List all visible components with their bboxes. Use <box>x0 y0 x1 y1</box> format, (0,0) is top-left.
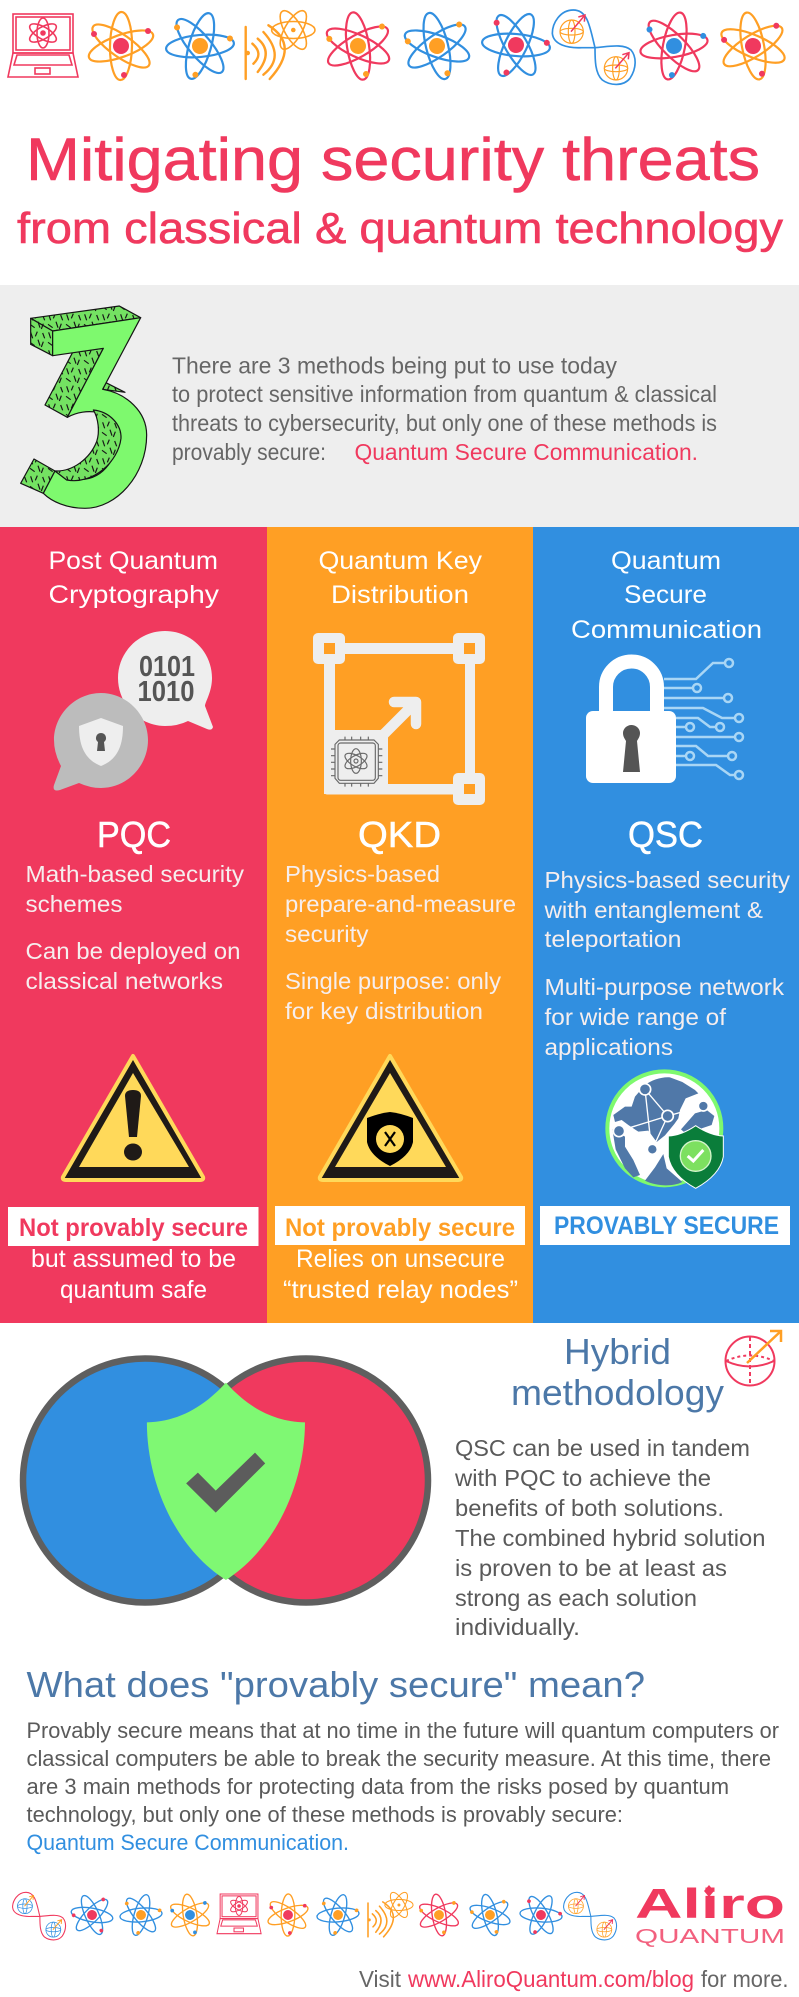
icon: red atom <box>414 1890 464 1940</box>
icon: orange atom <box>165 1890 215 1940</box>
text: hybrid explanation: The combined hybrid solution <box>455 1525 766 1551</box>
panel: QKD <box>267 527 533 1323</box>
icon: globe with green shield <box>607 1071 723 1188</box>
callout: not provably secure: Not provably secure <box>19 1214 248 1242</box>
heading: Hybrid methodology <box>511 1331 724 1413</box>
text: hybrid explanation: strong as each solution <box>455 1585 697 1611</box>
description: QSC: Multi-purpose network <box>544 974 785 1000</box>
heading: Quantum Key Distribution <box>318 547 483 609</box>
icon: blue atom <box>394 4 480 88</box>
icon: key distribution diagram <box>313 633 485 805</box>
text: hybrid explanation <box>454 1435 766 1640</box>
description: QSC <box>543 867 791 1060</box>
icon: signal waves and atom <box>245 7 315 79</box>
description: QSC: applications <box>544 1034 673 1060</box>
text: definition: classical computers be able to break the security measure. At this time, there <box>26 1746 771 1771</box>
heading: Quantum Key Distribution: Distribution <box>331 581 469 609</box>
icon: padlock with circuit lines <box>586 659 743 783</box>
icon: orange atom <box>711 5 795 87</box>
icon: orange atom <box>85 12 157 80</box>
logo: Aliro Quantum <box>635 1880 785 1948</box>
description: PQC: Math-based security <box>26 861 245 887</box>
icon: speech bubbles: 0101 <box>139 651 195 683</box>
footer link text: for more. <box>701 1966 788 1992</box>
bottom row of quantum icons <box>13 1886 617 1944</box>
top row of quantum icons <box>8 0 795 91</box>
text: hybrid explanation: individually. <box>455 1614 580 1640</box>
icon: red atom <box>317 6 399 86</box>
callout: not provably secure <box>275 1206 525 1245</box>
heading: Quantum Secure Communication: Secure <box>624 581 707 609</box>
title: from classical & quantum technology <box>17 204 783 253</box>
note: trusted relay nodes <box>283 1245 518 1304</box>
intro text: to protect sensitive information from quantum & classical <box>172 381 717 407</box>
description: PQC <box>26 861 245 994</box>
label: QKD: QKD <box>358 814 441 855</box>
icon: blue atom <box>463 1889 517 1941</box>
description: QSC: for wide range of <box>544 1004 727 1030</box>
note: assumed quantum safe: quantum safe <box>60 1276 207 1304</box>
text: hybrid explanation: is proven to be at least as <box>455 1555 727 1581</box>
text: hybrid explanation: QSC can be used in tandem <box>455 1435 750 1461</box>
icon: blue atom <box>114 1889 168 1941</box>
footer link text <box>359 1966 788 1992</box>
description: QKD: Physics-based <box>285 861 440 887</box>
label: QSC: QSC <box>628 814 703 855</box>
intro text: threats to cybersecurity, but only one of these methods is <box>172 410 717 436</box>
icon: laptop <box>8 14 78 77</box>
description: QSC: with entanglement & <box>543 897 763 923</box>
heading: what does provably secure mean: What does "provably secure" mean? <box>26 1664 645 1705</box>
panel: PQC <box>0 527 267 1323</box>
note: assumed quantum safe <box>31 1245 236 1304</box>
icon: blue atom <box>157 4 243 88</box>
description: QSC: teleportation <box>544 926 682 952</box>
icon: blue atom <box>512 1886 570 1944</box>
text: definition <box>26 1718 779 1855</box>
text: definition: are 3 main methods for protecting data from the risks posed by quantum <box>26 1774 729 1799</box>
icon: red atom with blue nucleus <box>633 6 715 86</box>
icon: signal waves and atom <box>368 1890 413 1937</box>
heading: Quantum Secure Communication <box>571 547 762 644</box>
icon: speech bubbles: 1010 <box>138 676 194 708</box>
description: PQC: classical networks <box>26 968 223 994</box>
heading: Post Quantum Cryptography <box>48 547 220 609</box>
note: trusted relay nodes: Relies on unsecure <box>296 1245 505 1273</box>
title <box>17 126 783 253</box>
icon: blue atom <box>63 1886 121 1944</box>
icon: speech bubbles <box>54 631 213 790</box>
callout: provably secure <box>540 1206 790 1245</box>
footer link text: Visit <box>359 1966 402 1992</box>
description: PQC: schemes <box>26 891 123 917</box>
icon: big green 3 <box>21 306 147 508</box>
intro text: There are 3 methods being put to use today <box>172 352 617 378</box>
title: Mitigating security threats <box>26 126 760 193</box>
text: definition: technology, but only one of these methods is provably secure: <box>26 1802 623 1827</box>
logo: Aliro Quantum: Aliro <box>635 1880 785 1927</box>
panel: QSC <box>533 527 799 1323</box>
icon: orange atom <box>266 1894 310 1936</box>
heading: Quantum Key Distribution: Quantum Key <box>318 547 483 575</box>
venn diagram with shield <box>23 1358 428 1602</box>
intro text <box>172 352 717 465</box>
text: hybrid explanation: with PQC to achieve the <box>454 1465 711 1491</box>
panel: intro <box>0 285 799 527</box>
description: QKD: security <box>285 921 369 947</box>
callout: not provably secure <box>8 1207 258 1246</box>
intro text: Quantum Secure Communication. <box>354 439 698 465</box>
text: hybrid explanation: benefits of both solutions. <box>455 1495 724 1521</box>
icon: blue atom <box>311 1889 365 1941</box>
icon: red entangled qubits <box>13 1892 66 1940</box>
description: QKD: for key distribution <box>285 998 483 1024</box>
footer link text: www.AliroQuantum.com/blog <box>407 1966 694 1992</box>
icon: blue entangled qubits <box>564 1892 617 1940</box>
heading: Hybrid methodology: methodology <box>511 1372 724 1413</box>
icon: laptop <box>217 1894 261 1934</box>
note: assumed quantum safe: but assumed to be <box>31 1245 236 1273</box>
heading: Quantum Secure Communication: Communication <box>571 616 762 644</box>
logo: Aliro Quantum: QUANTUM <box>635 1926 785 1948</box>
text: definition: Quantum Secure Communication. <box>26 1830 349 1855</box>
icon: entangled qubits <box>552 10 635 84</box>
icon: warning triangle <box>63 1056 203 1180</box>
description: QKD: Single purpose: only <box>285 968 502 994</box>
heading: Post Quantum Cryptography: Cryptography <box>48 581 220 609</box>
callout: not provably secure: Not provably secure <box>285 1214 515 1242</box>
icon: warning triangle with shield <box>320 1056 461 1180</box>
note: trusted relay nodes: “trusted relay nodes” <box>283 1276 518 1304</box>
callout: provably secure: PROVABLY SECURE <box>554 1212 779 1240</box>
heading: Quantum Secure Communication: Quantum <box>611 547 721 575</box>
icon: qubit sphere with arrow <box>726 1331 781 1386</box>
intro text: provably secure: <box>172 439 326 465</box>
text: definition: Provably secure means that at no time in the future will quantum computers or <box>26 1718 779 1743</box>
icon: blue atom with red nucleus <box>469 0 563 91</box>
heading: Hybrid methodology: Hybrid <box>564 1331 671 1372</box>
description: QKD: prepare-and-measure <box>285 891 516 917</box>
description: QSC: Physics-based security <box>544 867 791 893</box>
description: QKD <box>285 861 516 1024</box>
label: PQC: PQC <box>97 814 171 855</box>
description: PQC: Can be deployed on <box>26 938 241 964</box>
heading: Post Quantum Cryptography: Post Quantum <box>48 547 218 575</box>
